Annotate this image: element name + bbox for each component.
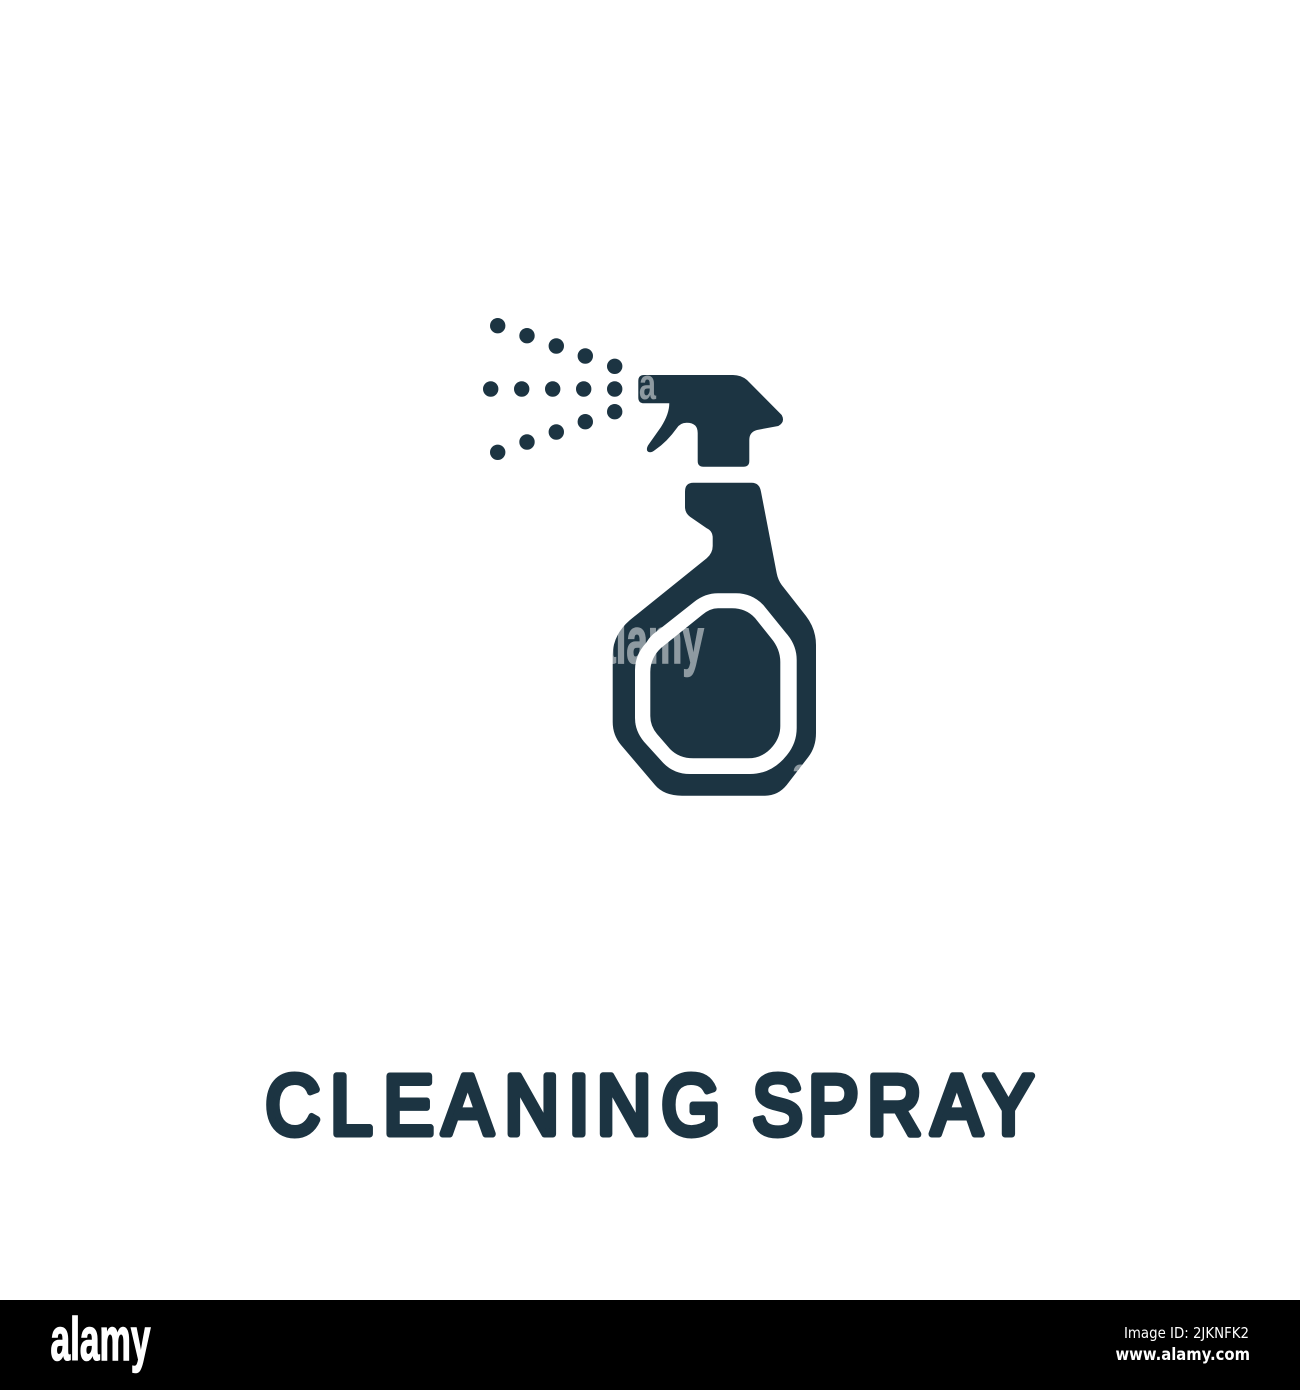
icon: spray trigger head (638, 375, 783, 467)
icon: bottle label ring (635, 593, 797, 774)
footer bar (0, 1300, 1300, 1390)
image id: Image ID: 2JKNFK2 (1124, 1324, 1249, 1342)
watermark: letter on bottle base: a (792, 749, 809, 796)
website: www.alamy.com (1116, 1345, 1250, 1365)
watermark: logotype on bottle: alamy (594, 604, 704, 677)
footer logo: alamy (50, 1306, 151, 1373)
watermark: letter on trigger head: a (639, 360, 656, 409)
icon: spray bottle body (613, 483, 816, 796)
title: CLEANING SPRAY (266, 1058, 1034, 1152)
icon: bottle label centre (650, 608, 780, 758)
icon: spray droplets (483, 318, 622, 460)
